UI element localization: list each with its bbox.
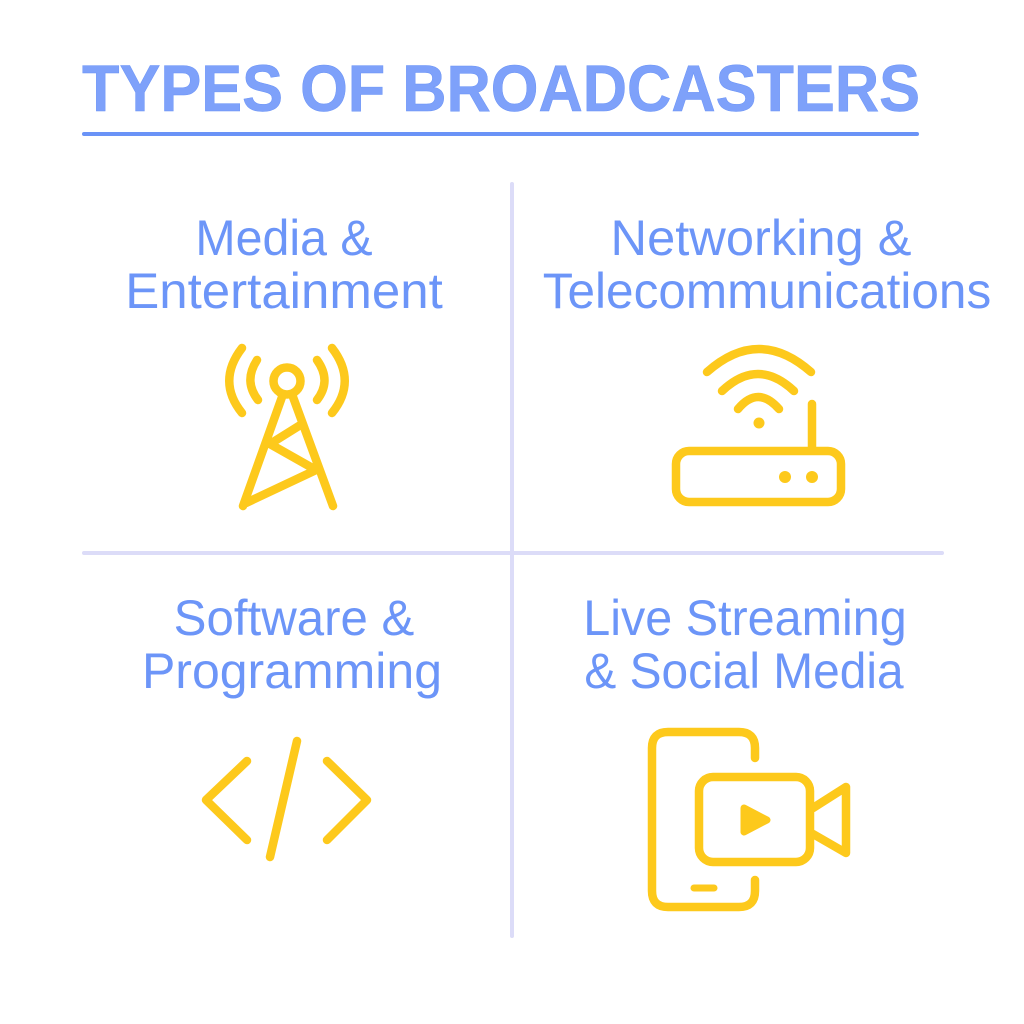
icon: phone with video camera: [652, 732, 846, 907]
heading: Media & Entertainment: Entertainment: [125, 263, 443, 319]
icon: broadcast tower: [229, 348, 345, 506]
icon: wifi router: [676, 349, 841, 502]
title: TYPES OF BROADCASTERS: [82, 51, 920, 125]
heading: Live Streaming & Social Media: Live Streaming: [583, 590, 907, 646]
horizontal divider: [82, 551, 944, 555]
heading: Software & Programming: Programming: [142, 643, 442, 699]
icon: code brackets: [206, 741, 367, 857]
heading: Networking & Telecommunications: Networking &: [611, 210, 911, 266]
heading: Media & Entertainment: Media &: [195, 210, 373, 266]
vertical divider: [510, 182, 514, 938]
heading: Live Streaming & Social Media: & Social Media: [584, 643, 904, 699]
title underline: [82, 132, 919, 136]
heading: Software & Programming: Software &: [174, 590, 414, 646]
heading: Networking & Telecommunications: Telecommunications: [543, 263, 991, 319]
